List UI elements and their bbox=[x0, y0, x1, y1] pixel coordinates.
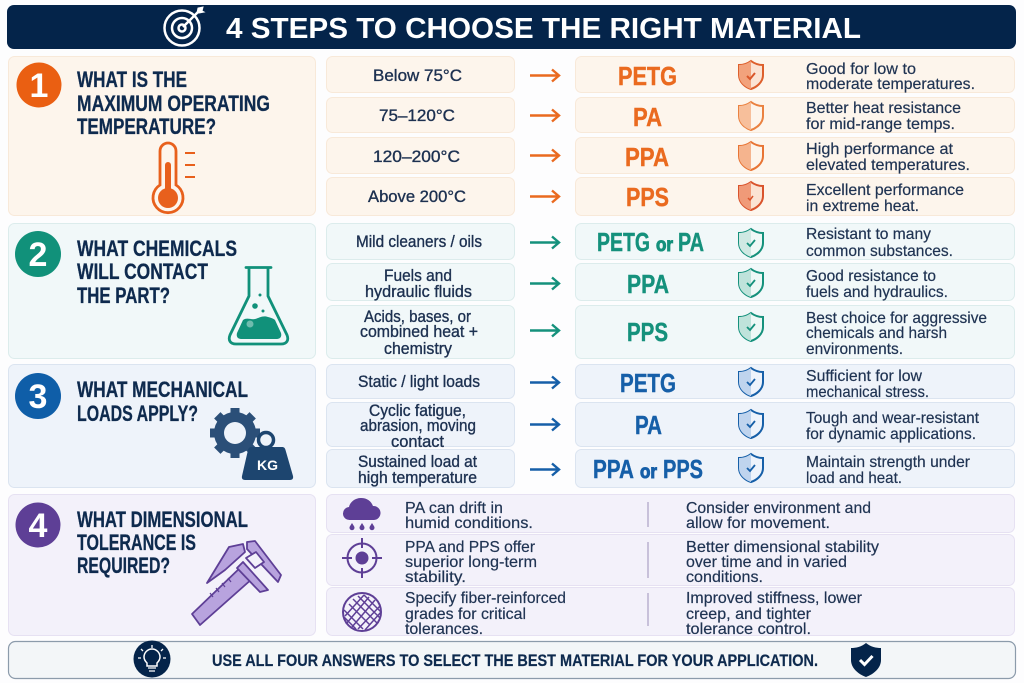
row: humid drift: PA can drift in bbox=[405, 500, 503, 517]
row: cyclic fatigue: abrasion, moving bbox=[360, 417, 476, 435]
row: fuels: Good resistance to bbox=[806, 268, 936, 285]
row: acids: chemistry bbox=[384, 340, 453, 358]
row: fiber-reinforced grades: tolerance control. bbox=[686, 621, 811, 638]
row: cyclic fatigue: Tough and wear-resistant bbox=[806, 410, 980, 427]
panel: question 2 bbox=[8, 224, 316, 358]
row: fiber-reinforced grades: Specify fiber-reinforced bbox=[405, 590, 566, 607]
heading 1 bbox=[77, 67, 270, 139]
icon: rain cloud bbox=[343, 498, 381, 530]
row: 75-120C: PA bbox=[633, 102, 662, 132]
row: mild cleaners: common substances. bbox=[806, 243, 953, 260]
heading 3 bbox=[77, 377, 248, 426]
row: acids bbox=[326, 306, 1014, 358]
icon: target with arrow bbox=[164, 7, 204, 46]
row: fuels: hydraulic fluids bbox=[365, 283, 472, 301]
row: above 200C: Above 200°C bbox=[368, 188, 466, 206]
row: acids: Acids, bases, or bbox=[364, 308, 471, 326]
heading 1: TEMPERATURE? bbox=[77, 114, 216, 139]
row: sustained load: high temperature bbox=[358, 469, 477, 487]
heading 3: LOADS APPLY? bbox=[77, 401, 198, 426]
row: cyclic fatigue: contact bbox=[391, 433, 444, 451]
heading 2 bbox=[77, 236, 237, 308]
row: acids: PPS bbox=[627, 317, 668, 347]
icon: flask bbox=[229, 268, 288, 344]
row: fuels: fuels and hydraulics. bbox=[806, 284, 948, 301]
row: static loads bbox=[326, 364, 1014, 401]
row: 120-200C: 120–200°C bbox=[373, 148, 460, 166]
number badge 3: 3 bbox=[29, 378, 47, 416]
row: long-term stability: stability. bbox=[405, 569, 466, 586]
row: sustained load bbox=[326, 450, 1014, 488]
row: mild cleaners: or bbox=[656, 235, 674, 256]
row: above 200C: Excellent performance bbox=[806, 182, 964, 199]
title bar bbox=[7, 5, 1016, 49]
row: 75-120C bbox=[326, 98, 1014, 133]
row: below 75C: Below 75°C bbox=[373, 67, 462, 85]
row: humid drift: humid conditions. bbox=[405, 515, 533, 532]
row: fuels: Fuels and bbox=[384, 267, 452, 285]
row: cyclic fatigue bbox=[326, 402, 1014, 451]
row: humid drift bbox=[326, 494, 1014, 532]
row: fiber-reinforced grades: grades for critical bbox=[405, 606, 526, 623]
heading 4: TOLERANCE IS bbox=[77, 530, 196, 555]
footer message: USE ALL FOUR ANSWERS TO SELECT THE BEST MATERIAL FOR YOUR APPLICATION. bbox=[212, 651, 818, 670]
icon: thermometer bbox=[153, 143, 195, 213]
row: long-term stability: over time and in varied bbox=[686, 554, 847, 571]
row: fiber-reinforced grades bbox=[326, 588, 1014, 638]
row: acids: Best choice for aggressive bbox=[806, 310, 987, 327]
row: mild cleaners: PA bbox=[678, 227, 704, 257]
row: fiber-reinforced grades: creep, and tighter bbox=[686, 606, 812, 623]
row: acids: environments. bbox=[806, 341, 903, 358]
row: cyclic fatigue: Cyclic fatigue, bbox=[369, 402, 466, 420]
row: fiber-reinforced grades: tolerances. bbox=[405, 621, 483, 638]
row: cyclic fatigue: PA bbox=[635, 410, 662, 440]
heading 3: WHAT MECHANICAL bbox=[77, 377, 248, 402]
number badge 4 bbox=[16, 502, 60, 548]
icon: gear and weight bbox=[210, 408, 293, 480]
icon: crosshair bbox=[342, 538, 382, 578]
row: mild cleaners: Mild cleaners / oils bbox=[356, 233, 482, 251]
row: 75-120C: 75–120°C bbox=[379, 107, 455, 125]
step 4: dimensional tolerance bbox=[8, 494, 1014, 638]
row: above 200C: PPS bbox=[626, 182, 669, 212]
row: mild cleaners bbox=[326, 224, 1014, 260]
row: sustained load: Maintain strength under bbox=[806, 454, 971, 471]
heading 2: WILL CONTACT bbox=[77, 259, 208, 284]
number badge 4: 4 bbox=[29, 507, 48, 545]
step 1: temperature bbox=[8, 56, 1014, 216]
title: 4 STEPS TO CHOOSE THE RIGHT MATERIAL bbox=[226, 13, 861, 45]
row: long-term stability: conditions. bbox=[686, 569, 763, 586]
number badge 2: 2 bbox=[29, 236, 47, 274]
row: below 75C: PETG bbox=[618, 61, 677, 91]
row: sustained load: PPA bbox=[593, 454, 634, 484]
row: 120-200C bbox=[326, 138, 1014, 174]
row: 75-120C: for mid-range temps. bbox=[806, 116, 955, 133]
row: mild cleaners: PETG bbox=[597, 227, 650, 257]
row: above 200C bbox=[326, 178, 1014, 216]
row: static loads: mechanical stress. bbox=[806, 384, 929, 401]
row: acids: combined heat + bbox=[360, 323, 478, 341]
panel: question 1 bbox=[8, 56, 316, 216]
row: humid drift: Consider environment and bbox=[686, 500, 871, 517]
row: mild cleaners: Resistant to many bbox=[806, 226, 931, 243]
heading 1: MAXIMUM OPERATING bbox=[77, 91, 270, 116]
step 3: mechanical loads bbox=[8, 364, 1014, 488]
row: 120-200C: High performance at bbox=[806, 141, 954, 158]
row: below 75C: moderate temperatures. bbox=[806, 76, 975, 93]
number badge 1 bbox=[16, 62, 62, 108]
icon: shield check bbox=[851, 643, 881, 677]
row: acids: chemicals and harsh bbox=[806, 325, 947, 342]
row: long-term stability bbox=[326, 534, 1014, 586]
footer banner bbox=[8, 640, 1016, 678]
row: sustained load: or bbox=[640, 462, 658, 483]
row: static loads: Static / light loads bbox=[358, 373, 480, 391]
number badge 1: 1 bbox=[30, 67, 48, 105]
panel: question 4 bbox=[8, 494, 316, 636]
row: 75-120C: Better heat resistance bbox=[806, 100, 961, 117]
row: above 200C: in extreme heat. bbox=[806, 198, 919, 215]
icon: caliper bbox=[192, 541, 281, 625]
heading 4: WHAT DIMENSIONAL bbox=[77, 507, 248, 532]
row: sustained load: Sustained load at bbox=[358, 453, 477, 471]
row: static loads: Sufficient for low bbox=[806, 368, 922, 385]
panel: question 3 bbox=[8, 364, 316, 488]
row: sustained load: PPS bbox=[663, 454, 703, 484]
row: below 75C bbox=[326, 56, 1014, 93]
row: humid drift: allow for movement. bbox=[686, 515, 830, 532]
row: 120-200C: elevated temperatures. bbox=[806, 157, 970, 174]
row: cyclic fatigue: for dynamic applications. bbox=[806, 426, 976, 443]
heading 1: WHAT IS THE bbox=[77, 67, 187, 92]
number badge 3 bbox=[15, 373, 61, 419]
row: fuels: PPA bbox=[627, 269, 669, 299]
row: long-term stability: Better dimensional stability bbox=[686, 539, 879, 556]
icon: fiber mesh bbox=[343, 593, 381, 631]
row: sustained load: load and heat. bbox=[806, 470, 902, 487]
heading 4 bbox=[77, 507, 248, 578]
icon: light bulb bbox=[134, 640, 170, 678]
row: 120-200C: PPA bbox=[625, 142, 669, 172]
step 2: chemicals bbox=[8, 224, 1014, 358]
number badge 2 bbox=[15, 231, 61, 277]
icon: gear and weight: KG bbox=[257, 457, 278, 473]
row: static loads: PETG bbox=[620, 368, 676, 398]
heading 2: WHAT CHEMICALS bbox=[77, 236, 237, 261]
heading 4: REQUIRED? bbox=[77, 553, 170, 578]
row: fiber-reinforced grades: Improved stiffness, lower bbox=[686, 590, 863, 607]
heading 2: THE PART? bbox=[77, 283, 170, 308]
row: long-term stability: superior long-term bbox=[405, 554, 537, 571]
row: long-term stability: PPA and PPS offer bbox=[405, 539, 536, 556]
row: below 75C: Good for low to bbox=[806, 61, 916, 78]
row: fuels bbox=[326, 264, 1014, 301]
